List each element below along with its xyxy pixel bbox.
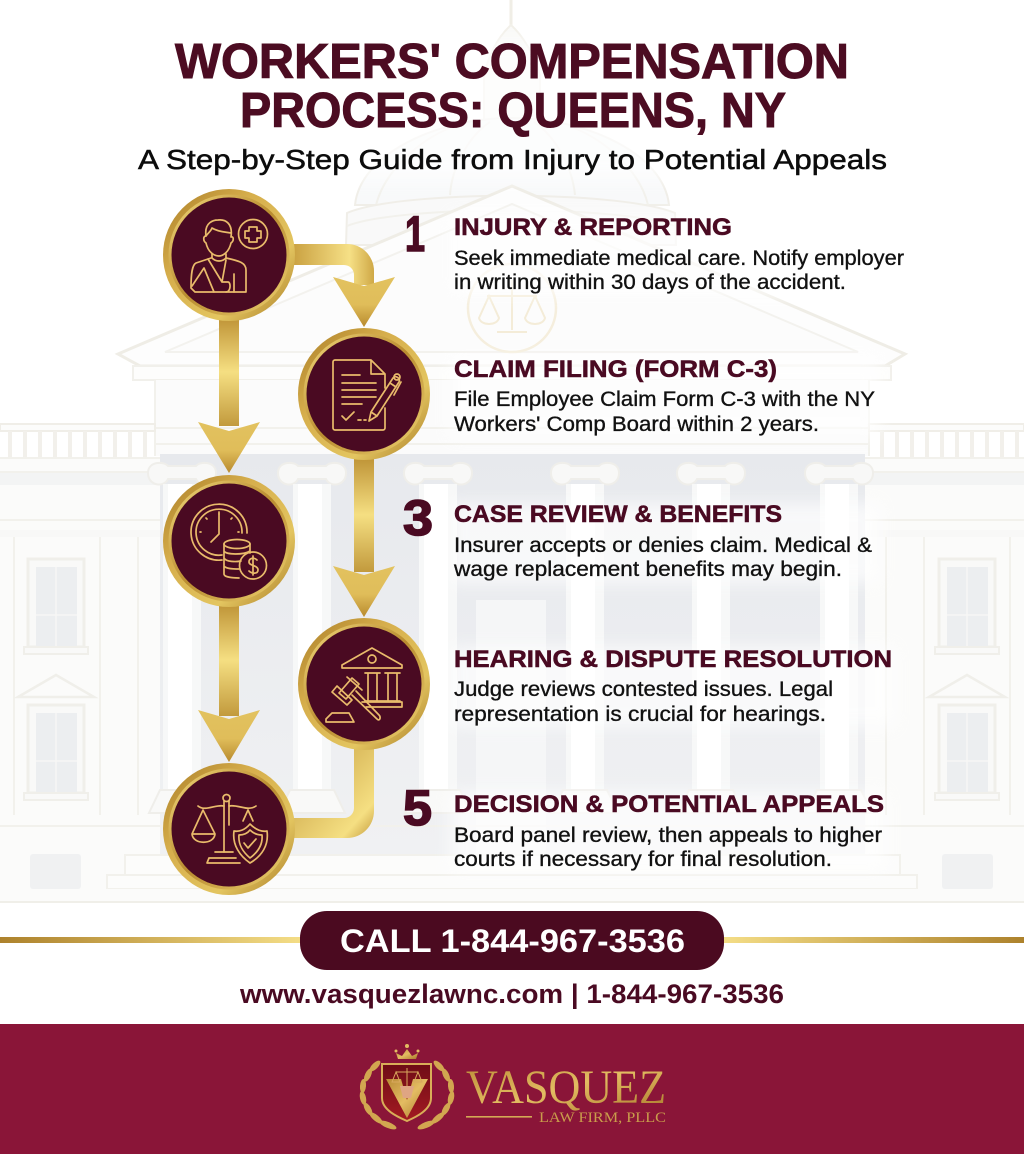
icon: crown <box>394 1044 420 1059</box>
step 3: case review and benefits: CASE REVIEW & BENEFITS <box>454 501 782 528</box>
step 3: case review and benefits <box>403 490 872 581</box>
background: faded courthouse illustration <box>0 0 1024 903</box>
arrow: step 1 down to clock circle <box>198 318 260 473</box>
step 1: injury and reporting <box>405 206 904 294</box>
step 4: hearing and dispute resolution: representation is crucial for hearings. <box>454 703 826 726</box>
arrow: clock circle down to scales circle <box>198 604 260 762</box>
step 2: claim filing: File Employee Claim Form C-3 with the NY <box>454 388 875 411</box>
step 5: decision and potential appeals: 5 <box>403 780 432 836</box>
step 1: injury and reporting: in writing within 30 days of the accident. <box>454 271 846 294</box>
logo tagline: LAW FIRM, PLLC <box>539 1110 666 1126</box>
step 5: decision and potential appeals: Board panel review, then appeals to higher <box>454 824 882 847</box>
step 5: decision and potential appeals: DECISION & POTENTIAL APPEALS <box>454 791 884 818</box>
circle icon: courthouse and gavel <box>298 618 430 750</box>
circle icon: claim form <box>298 328 430 460</box>
step 3: case review and benefits: 3 <box>403 490 433 546</box>
footer band <box>0 1024 1024 1154</box>
step 1: injury and reporting: Seek immediate medical care. Notify employer <box>454 247 904 270</box>
logo: Vasquez Law Firm <box>359 1044 666 1131</box>
arrow: step 1 right and down to form circle <box>292 244 395 327</box>
step 4: hearing and dispute resolution: Judge reviews contested issues. Legal <box>454 678 833 701</box>
step 1: injury and reporting: INJURY & REPORTING <box>454 214 732 241</box>
step 4: hearing and dispute resolution: HEARING & DISPUTE RESOLUTION <box>454 646 892 673</box>
step 4: hearing and dispute resolution <box>454 646 892 726</box>
arrow: form circle down to courthouse circle <box>333 458 395 617</box>
title: WORKERS' COMPENSATION <box>175 35 849 89</box>
circle icon: injured worker <box>163 189 295 321</box>
call to action button <box>300 911 724 970</box>
step 2: claim filing <box>454 356 875 436</box>
website and phone: www.vasquezlawnc.com | 1-844-967-3536 <box>239 979 784 1009</box>
icon: laurel wreath <box>359 1059 455 1131</box>
step 2: claim filing: CLAIM FILING (FORM C-3) <box>454 356 777 383</box>
circle icon: scales of justice and shield <box>163 763 295 895</box>
circle icon: clock and coins <box>163 475 295 607</box>
step 1: injury and reporting: 1 <box>405 206 425 262</box>
step 2: claim filing: Workers' Comp Board within 2 years. <box>454 413 819 436</box>
step 5: decision and potential appeals: courts if necessary for final resolution. <box>454 848 832 871</box>
arrow: courthouse circle connecting to scales circle <box>292 748 374 838</box>
step 3: case review and benefits: Insurer accepts or denies claim. Medical & <box>454 534 872 557</box>
call to action button: CALL 1-844-967-3536 <box>340 923 685 959</box>
icon: shield with V <box>382 1064 431 1121</box>
title: PROCESS: QUEENS, NY <box>240 84 786 138</box>
gold divider line <box>0 937 1024 943</box>
step 5: decision and potential appeals <box>403 780 884 871</box>
title <box>175 35 849 138</box>
logo rule <box>466 1116 532 1118</box>
step 3: case review and benefits: wage replacement benefits may begin. <box>453 558 842 581</box>
logo wordmark: VASQUEZ <box>466 1061 666 1114</box>
subtitle: A Step-by-Step Guide from Injury to Potential Appeals <box>138 144 887 175</box>
